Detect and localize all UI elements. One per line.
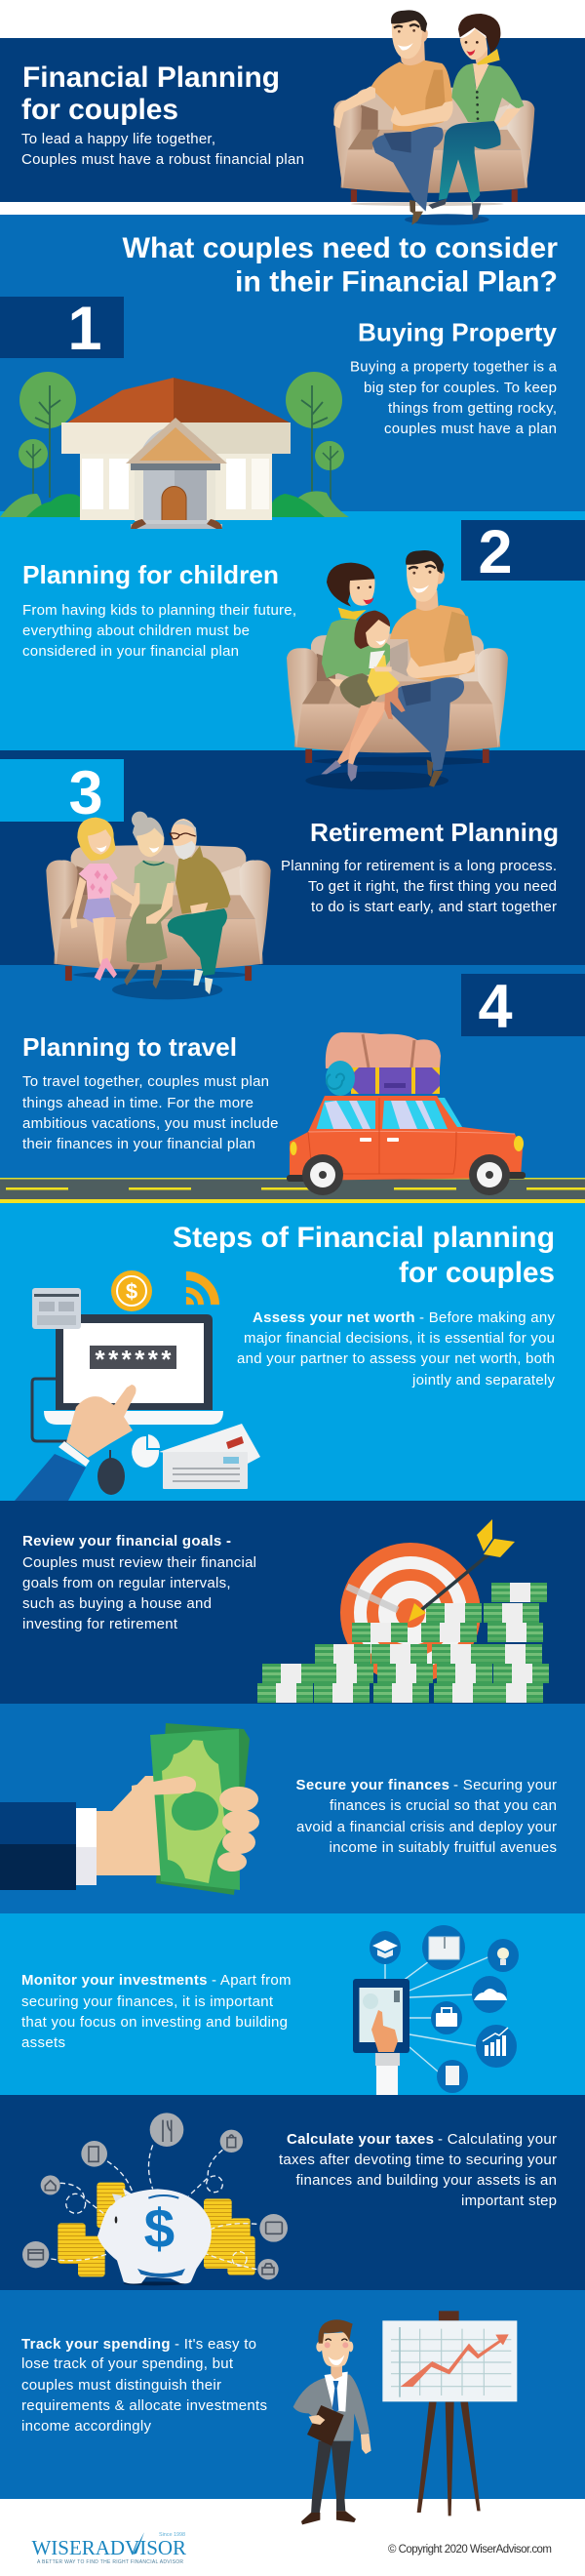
section heading: what couples need to consider: [123, 232, 558, 299]
illustration: chart on easel: [382, 2311, 517, 2516]
body text: - Before making any: [419, 1309, 556, 1326]
panel: monitor your investments: [0, 1913, 585, 2095]
illustration: piggy bank with coins and expense icons: [22, 2113, 288, 2285]
body text: [21, 1972, 291, 2051]
body text: big step for couples. To keep: [364, 380, 557, 396]
body text: Monitor your investments: [21, 1972, 207, 1989]
illustration: laptop with password: ******: [96, 1345, 172, 1374]
number 2 badge: 2: [478, 518, 513, 586]
panel: assess your net worth: [0, 1203, 585, 1501]
icon: coin stacks: [58, 2183, 255, 2276]
body text: - Securing your: [453, 1777, 557, 1793]
body text: jointly and separately: [411, 1372, 556, 1389]
subtitle: [21, 131, 304, 168]
body text: Assess your net worth: [253, 1309, 415, 1326]
body text: things from getting rocky,: [388, 400, 557, 417]
logo: WiserAdvisor: A BETTER WAY TO FIND THE RIGHT FINANCIAL ADVISOR: [37, 2559, 183, 2565]
illustration: target: [340, 1543, 481, 1683]
body text: - Calculating your: [438, 2131, 557, 2148]
illustration: laptop with password: [15, 1270, 260, 1501]
body text: Couples must review their financial: [22, 1554, 256, 1571]
title: Financial Planning: [22, 61, 280, 94]
number 3 badge: 3: [68, 759, 103, 827]
body text: [22, 1073, 279, 1152]
illustration: family with child on sofa: [287, 550, 508, 789]
body text: avoid a financial crisis and deploy your: [296, 1819, 557, 1835]
section heading: what couples need to consider: in their Financial Plan?: [235, 265, 558, 299]
body text: assets: [21, 2034, 65, 2051]
icon: piggy bank: [98, 2189, 212, 2285]
number 1 badge: 1: [67, 295, 102, 363]
body text: couples must distinguish their: [21, 2377, 221, 2394]
illustration: tablet with icons: [353, 1925, 519, 2095]
body text: To travel together, couples must plan: [22, 1073, 269, 1090]
heading: Buying Property: [358, 318, 558, 347]
body text: Secure your finances: [296, 1777, 449, 1793]
heading: Retirement Planning: [310, 818, 559, 847]
illustration: trees: [0, 372, 349, 517]
body text: requirements & allocate investments: [21, 2397, 267, 2414]
section heading: steps of financial planning: Steps of Financial planning: [173, 1222, 555, 1254]
body text: things ahead in time. For the more: [22, 1095, 254, 1111]
number 3 badge: [0, 759, 124, 827]
logo: WiserAdvisor: Since 1998: [159, 2532, 185, 2538]
body text: [21, 2336, 267, 2435]
number 4 badge: [461, 973, 585, 1041]
body text: and your partner to assess your net worth, both: [237, 1350, 555, 1367]
body text: Track your spending: [21, 2336, 170, 2353]
body text: [22, 1533, 256, 1632]
number 4 badge: 4: [478, 973, 513, 1041]
body text: Calculate your taxes: [287, 2131, 434, 2148]
body text: Planning for retirement is a long process.: [281, 858, 557, 874]
copyright: © Copyright 2020 WiserAdvisor.com: [388, 2544, 552, 2556]
body text: lose track of your spending, but: [21, 2355, 234, 2372]
body text: finances is crucial so that you can: [330, 1797, 557, 1814]
subtitle: Couples must have a robust financial plan: [21, 151, 304, 168]
icon: piggy bank: $: [144, 2199, 175, 2261]
body text: Review your financial goals -: [22, 1533, 231, 1550]
body text: goals from on regular intervals,: [22, 1575, 230, 1591]
body text: income accordingly: [21, 2418, 152, 2435]
illustration: businessman: [293, 2319, 371, 2524]
illustration: grandparents and daughter on sofa: [46, 812, 271, 999]
number 2 badge: [461, 518, 585, 586]
body text: considered in your financial plan: [22, 643, 239, 660]
body text: [279, 2131, 557, 2209]
illustration: hand holding cash: [0, 1723, 259, 1895]
body text: - Apart from: [212, 1972, 291, 1989]
body text: [237, 1309, 556, 1389]
body text: major financial decisions, it is essential for you: [244, 1330, 555, 1347]
body text: important step: [461, 2193, 557, 2209]
panel: track your spending: [0, 2290, 585, 2524]
panel: retirement planning: [0, 750, 585, 999]
body text: [22, 602, 296, 660]
panel: secure your finances: [0, 1704, 585, 1913]
body text: finances and building your assets is an: [296, 2172, 557, 2189]
road: [0, 1178, 585, 1203]
title: [21, 61, 280, 126]
panel: planning to travel: [0, 965, 585, 1203]
number 1 badge: [0, 295, 124, 363]
body text: Buying a property together is a: [350, 359, 558, 375]
panel: planning for children: [0, 511, 585, 789]
body text: investing for retirement: [22, 1616, 178, 1632]
panel: buying property: [0, 295, 585, 529]
body text: that you focus on investing and building: [21, 2014, 288, 2031]
icon: dashed paths: [51, 2145, 256, 2270]
illustration: car with luggage: [287, 1032, 526, 1195]
footer: [0, 2499, 585, 2576]
illustration: couple on sofa: [333, 10, 534, 225]
body text: securing your finances, it is important: [21, 1993, 274, 2010]
body text: - It's easy to: [175, 2336, 256, 2353]
body text: everything about children must be: [22, 623, 250, 639]
logo: WiserAdvisor: WISERADVISOR: [31, 2536, 186, 2559]
panel: header: [0, 10, 585, 225]
heading: Planning for children: [22, 560, 279, 589]
title: for couples: [21, 94, 178, 126]
body text: ambitious vacations, you must include: [22, 1115, 279, 1132]
section heading: steps of financial planning: for couples: [399, 1257, 555, 1289]
icon: expense circles: [22, 2113, 288, 2279]
section heading: steps of financial planning: [173, 1222, 555, 1289]
section heading: what couples need to consider: What couples need to consider: [123, 232, 558, 264]
icon: arrow in target: [409, 1519, 515, 1622]
subtitle: To lead a happy life together,: [21, 131, 215, 147]
illustration: house: [61, 378, 291, 529]
body text: To get it right, the first thing you need: [308, 878, 557, 895]
body text: to do is start early, and start together: [311, 899, 557, 915]
body text: [350, 359, 558, 437]
heading: Planning to travel: [22, 1032, 237, 1062]
body text: their finances in your financial plan: [22, 1136, 255, 1152]
body text: such as buying a house and: [22, 1595, 212, 1612]
panel: calculate your taxes: [0, 2095, 585, 2290]
body text: income in suitably fruitful avenues: [330, 1839, 557, 1856]
body text: From having kids to planning their future,: [22, 602, 296, 619]
illustration: laptop with password: $: [126, 1279, 137, 1304]
body text: couples must have a plan: [384, 421, 557, 437]
illustration: money stacks: [257, 1583, 549, 1703]
body text: taxes after devoting time to securing your: [279, 2152, 557, 2168]
panel: review your financial goals: [0, 1501, 585, 1704]
body text: [296, 1777, 557, 1856]
body text: [281, 858, 557, 915]
